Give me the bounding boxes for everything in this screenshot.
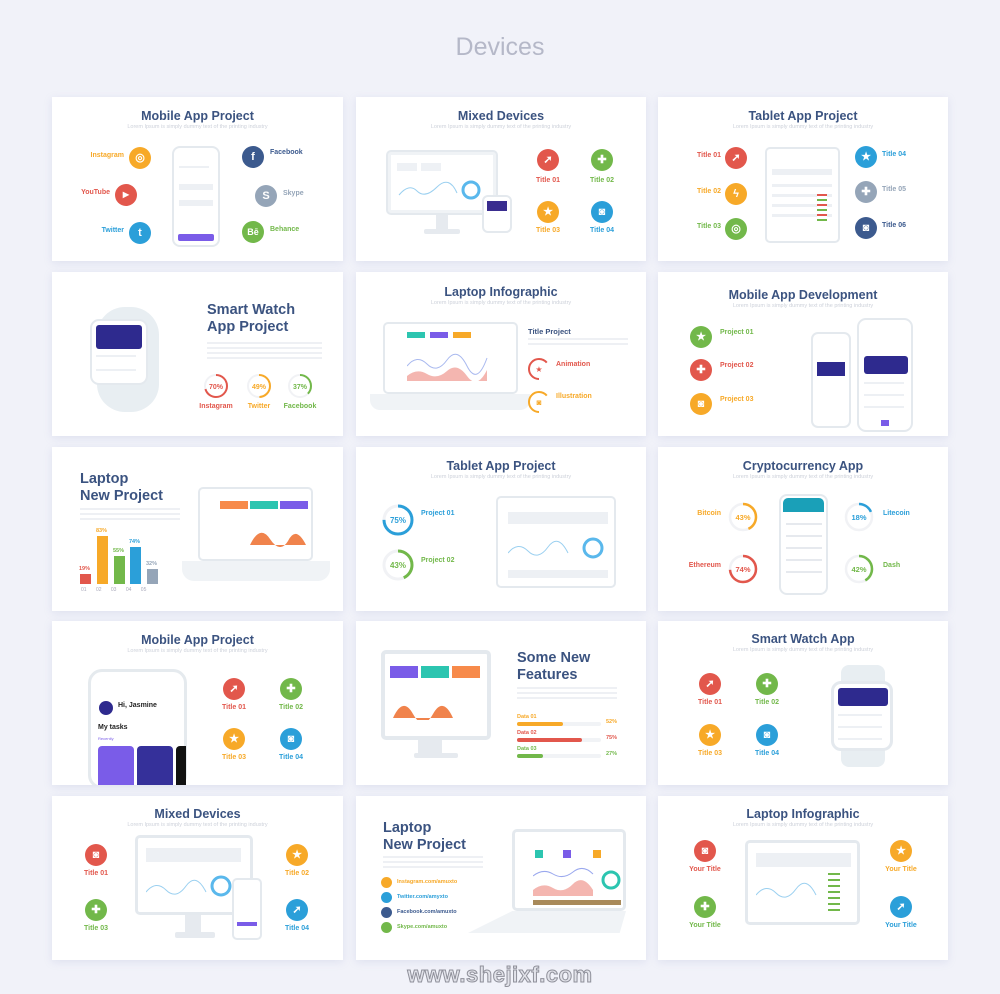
- heading: Cryptocurrency App: [743, 459, 863, 473]
- heading: Smart Watch: [207, 302, 295, 318]
- icon: twitter: t: [138, 227, 142, 239]
- panel: some new features: [356, 621, 646, 785]
- bar chart: 01 02 03 04 05: [81, 587, 146, 593]
- progress: data 02: Data 02: [517, 730, 537, 736]
- icon: your title 1: ◙: [702, 845, 708, 857]
- label your title 2: Your Title: [689, 922, 721, 929]
- label title 02: Title 02: [279, 704, 303, 711]
- panel: cryptocurrency app: [658, 447, 948, 611]
- ring: project 02 43%: [382, 550, 414, 580]
- phone: [88, 669, 187, 789]
- ring: twitter 49%: 49%: [252, 384, 267, 391]
- icon: your title 3: [890, 840, 912, 862]
- laptop: [745, 840, 860, 925]
- icon: facebook: [242, 146, 264, 168]
- heading: Laptop: [80, 471, 128, 487]
- subtitle: Lorem Ipsum is simply dummy text of the printing industry: [127, 648, 268, 654]
- heading: Tablet App Project: [748, 109, 858, 123]
- icon: skype: [255, 185, 277, 207]
- monitor and phone: [135, 835, 262, 940]
- subtitle: Lorem Ipsum is simply dummy text of the printing industry: [127, 124, 268, 130]
- icon: title 04: ◙: [599, 206, 605, 218]
- label title 01: Title 01: [698, 699, 722, 706]
- description: [207, 342, 322, 362]
- social list: Facebook.com/amuxto: [397, 909, 457, 915]
- label title 04: Title 04: [279, 754, 303, 761]
- ring: project 01 75%: [382, 504, 414, 536]
- smart watch: [831, 665, 893, 767]
- icon: title 01: [699, 673, 721, 695]
- icon: title 01: [223, 678, 245, 700]
- icon: your title 4: [890, 896, 912, 918]
- label title 02: Title 02: [697, 188, 721, 195]
- label title 05: Title 05: [882, 186, 906, 193]
- heading: [80, 471, 163, 504]
- label title 03: Title 03: [84, 925, 108, 932]
- icon: instagram: [129, 147, 151, 169]
- ring: bitcoin 43%: 43%: [735, 513, 751, 522]
- laptop: [370, 322, 530, 410]
- ring: instagram 70%: [204, 374, 228, 398]
- label title 04: Title 04: [285, 925, 309, 932]
- heading: Some New: [517, 650, 590, 666]
- icon: title 03: [699, 724, 721, 746]
- title: Devices: [456, 33, 544, 61]
- heading: Mixed Devices: [154, 807, 241, 821]
- icon: instagram: ◎: [135, 152, 145, 164]
- ring: ethereum 74%: 74%: [735, 565, 751, 574]
- icon: title 03: ★: [705, 729, 715, 741]
- ring: dash 42%: [845, 554, 874, 583]
- ring icon: animation: ★: [535, 365, 543, 374]
- ring: instagram 70%: 70%: [209, 384, 224, 391]
- social list: [381, 877, 457, 933]
- label title 04: Title 04: [590, 227, 614, 234]
- icon: project 01: ★: [696, 331, 706, 343]
- icon: your title 2: [694, 896, 716, 918]
- ring: facebook 37%: 37%: [293, 384, 308, 391]
- heading: New Project: [80, 488, 163, 504]
- icon: project 03: [690, 393, 712, 415]
- icon: title 02: ϟ: [733, 188, 739, 200]
- progress: data 03: Data 03: [517, 746, 537, 752]
- heading: Laptop Infographic: [746, 807, 860, 821]
- progress: data 03: 27%: [606, 751, 617, 757]
- icon: behance: [242, 221, 264, 243]
- label ethereum: Ethereum: [689, 562, 721, 569]
- panel: laptop new project with bars: 83%: [96, 528, 107, 534]
- panel: smart watch app: [658, 621, 948, 785]
- icon: project 02: ✚: [696, 364, 706, 376]
- laptop: [182, 487, 330, 581]
- icon: title 04: [756, 724, 778, 746]
- heading: Mobile App Project: [141, 633, 254, 647]
- subtitle: Lorem Ipsum is simply dummy text of the printing industry: [733, 822, 873, 828]
- icon: title 02: ✚: [286, 683, 296, 695]
- label title 02: Title 02: [285, 870, 309, 877]
- icon: title 02: [591, 149, 613, 171]
- icon: skype: S: [262, 190, 270, 202]
- heading: Mixed Devices: [458, 109, 544, 123]
- icon: title 01: ➚: [229, 683, 239, 695]
- icon: youtube: [115, 184, 137, 206]
- description: [517, 687, 617, 699]
- ring: facebook 37%: [288, 374, 312, 398]
- subtitle: Lorem Ipsum is simply dummy text of the printing industry: [733, 124, 873, 130]
- icon: title 03: ◎: [731, 223, 741, 235]
- icon: title 03: ★: [229, 733, 239, 745]
- icon: title 03: ✚: [91, 904, 101, 916]
- monitor: [381, 650, 491, 758]
- progress: data 01: 52%: [606, 719, 617, 725]
- progress: data 01: [517, 714, 617, 726]
- icon: title 06: ◙: [863, 222, 869, 234]
- bar chart: [79, 528, 158, 593]
- ring: project 02 43%: 43%: [390, 561, 406, 570]
- description: [80, 508, 180, 520]
- label title 03: Title 03: [222, 754, 246, 761]
- panel: tablet app project 2: [356, 447, 646, 611]
- panel: laptop infographic 2: [658, 796, 948, 960]
- label project 01: Project 01: [720, 329, 753, 336]
- label litecoin: Litecoin: [883, 510, 910, 517]
- ring icon: animation: [528, 358, 548, 380]
- heading: App Project: [207, 319, 288, 335]
- icon: title 01: [537, 149, 559, 171]
- label youtube: YouTube: [81, 189, 110, 196]
- icon: title 05: ✚: [861, 186, 871, 198]
- ring icon: illustration: [528, 391, 548, 413]
- heading: New Project: [383, 837, 466, 853]
- icon: title 01: ➚: [705, 678, 715, 690]
- heading: Smart Watch App: [751, 632, 855, 646]
- heading: Laptop Infographic: [444, 285, 558, 299]
- social list: Twitter.com/amyxto: [397, 894, 448, 900]
- icon: title 02: [756, 673, 778, 695]
- icon: title 03: [537, 201, 559, 223]
- heading: Laptop: [383, 820, 431, 836]
- label facebook: Facebook: [284, 403, 316, 410]
- icon: your title 4: ➚: [896, 901, 906, 913]
- heading: Mobile App Project: [141, 109, 254, 123]
- label title 02: Title 02: [755, 699, 779, 706]
- label instagram: Instagram: [199, 403, 233, 410]
- ring: dash 42%: 42%: [851, 565, 867, 574]
- label twitter: Twitter: [102, 227, 124, 234]
- label title 01: Title 01: [84, 870, 108, 877]
- ring: litecoin 18%: 18%: [851, 513, 867, 522]
- bar chart: 74%: [129, 539, 140, 545]
- heading: Tablet App Project: [446, 459, 556, 473]
- icon: title 02: [280, 678, 302, 700]
- label title 01: Title 01: [222, 704, 246, 711]
- icon: title 05: [855, 181, 877, 203]
- ring: project 01 75%: 75%: [390, 516, 406, 525]
- icon: behance: Bē: [247, 227, 259, 237]
- label twitter: Twitter: [248, 403, 270, 410]
- panel: mixed devices 2: [52, 796, 343, 960]
- panel: laptop new project with bars: [52, 447, 343, 611]
- subtitle: Lorem Ipsum is simply dummy text of the printing industry: [431, 300, 571, 306]
- label behance: Behance: [270, 226, 299, 233]
- subtitle: Lorem Ipsum is simply dummy text of the printing industry: [733, 303, 873, 309]
- panel: tablet app project 1: [658, 97, 948, 261]
- icon: project 03: ◙: [698, 398, 704, 410]
- panel: smart watch app project: [52, 272, 343, 436]
- icon: your title 2: ✚: [700, 901, 710, 913]
- label dash: Dash: [883, 562, 900, 569]
- icon: title 01: ◙: [93, 849, 99, 861]
- ring: litecoin 18%: [845, 502, 873, 531]
- icon: title 03: ★: [543, 206, 553, 218]
- icon: title 04: [591, 201, 613, 223]
- heading: [207, 302, 295, 335]
- panel: laptop infographic 1: [356, 272, 646, 436]
- bar chart: 55%: [113, 548, 124, 554]
- icon: twitter: [129, 222, 151, 244]
- icon: title 04: ◙: [288, 733, 294, 745]
- subtitle: Lorem Ipsum is simply dummy text of the printing industry: [431, 474, 571, 480]
- phones: [811, 318, 913, 432]
- label title 01: Title 01: [536, 177, 560, 184]
- icon: title 01: [725, 147, 747, 169]
- icon: title 03: [725, 218, 747, 240]
- ring: twitter 49%: [247, 374, 271, 398]
- social list: Instagram.com/amuxto: [397, 879, 457, 885]
- icon: title 02: ✚: [762, 678, 772, 690]
- label title 02: Title 02: [590, 177, 614, 184]
- watermark: www.shejixf.com: [407, 962, 593, 987]
- monitor: [386, 150, 498, 234]
- label title 03: Title 03: [536, 227, 560, 234]
- icon: title 04: [286, 899, 308, 921]
- tablet: [496, 496, 616, 588]
- smart watch: [90, 307, 159, 412]
- panel: mobile app project 2: [52, 621, 343, 785]
- icon: project 01: [690, 326, 712, 348]
- heading: [383, 820, 466, 853]
- label facebook: Facebook: [270, 149, 303, 156]
- panel: laptop new project social: [356, 796, 646, 960]
- phone: Hi, Jasmine: [118, 702, 157, 709]
- icon: title 01: ➚: [731, 152, 741, 164]
- label your title 3: Your Title: [885, 866, 917, 873]
- icon: title 03: [85, 899, 107, 921]
- label project 02: Project 02: [720, 362, 753, 369]
- ring icon: illustration: ◙: [537, 398, 542, 407]
- phone mockup: [172, 146, 220, 247]
- heading: Mobile App Development: [729, 288, 877, 302]
- icon: title 02: [286, 844, 308, 866]
- heading: Features: [517, 667, 577, 683]
- icon: your title 1: [694, 840, 716, 862]
- heading: [517, 650, 590, 683]
- icon: youtube: ▶: [123, 190, 129, 199]
- bar chart: 19%: [79, 566, 90, 572]
- icon: title 02: ★: [292, 849, 302, 861]
- icon: title 01: [85, 844, 107, 866]
- icon: title 04: [855, 146, 877, 168]
- icon: title 06: [855, 217, 877, 239]
- label animation: Animation: [556, 361, 590, 368]
- phone: My tasks: [98, 724, 128, 731]
- subtitle: Lorem Ipsum is simply dummy text of the printing industry: [431, 124, 571, 130]
- subtitle: Lorem Ipsum is simply dummy text of the printing industry: [733, 647, 873, 653]
- panel: mixed devices 1: [356, 97, 646, 261]
- icon: title 04: ◙: [764, 729, 770, 741]
- smart watch: [482, 195, 512, 233]
- label project 02: Project 02: [421, 557, 454, 564]
- panel: mobile app development: [658, 272, 948, 436]
- icon: title 04: ➚: [292, 904, 302, 916]
- progress: data 02: [517, 730, 617, 742]
- label title 04: Title 04: [755, 750, 779, 757]
- panel: mobile app project 1: [52, 97, 343, 261]
- icon: title 04: [280, 728, 302, 750]
- progress: data 01: Data 01: [517, 714, 537, 720]
- ring: bitcoin 43%: [729, 502, 758, 531]
- icon: title 01: ➚: [543, 154, 553, 166]
- phone: Recently: [98, 736, 114, 741]
- subtitle: Lorem Ipsum is simply dummy text of the printing industry: [733, 474, 873, 480]
- label instagram: Instagram: [91, 152, 124, 159]
- label skype: Skype: [283, 190, 304, 197]
- label your title 1: Your Title: [689, 866, 721, 873]
- label title 01: Title 01: [697, 152, 721, 159]
- subtitle: Lorem Ipsum is simply dummy text of the printing industry: [127, 822, 268, 828]
- label project 03: Project 03: [720, 396, 753, 403]
- label title 03: Title 03: [698, 750, 722, 757]
- icon: title 03: [223, 728, 245, 750]
- label title 04: Title 04: [882, 151, 906, 158]
- icon: your title 3: ★: [896, 845, 906, 857]
- description: [383, 856, 483, 868]
- label your title 4: Your Title: [885, 922, 917, 929]
- laptop: [468, 829, 626, 933]
- tablet: [765, 147, 840, 243]
- icon: title 04: ★: [861, 151, 871, 163]
- phone: [779, 494, 828, 595]
- progress: data 03: [517, 746, 617, 758]
- ring: ethereum 74%: [728, 554, 758, 584]
- label bitcoin: Bitcoin: [697, 510, 721, 517]
- progress: data 02: 75%: [606, 735, 617, 741]
- social list: Skype.com/amuxto: [397, 924, 447, 930]
- label illustration: Illustration: [556, 393, 592, 400]
- icon: project 02: [690, 359, 712, 381]
- bar chart: 32%: [146, 561, 157, 567]
- icon: facebook: f: [251, 151, 255, 163]
- text block: title project: Title Project: [528, 327, 571, 336]
- label title 03: Title 03: [697, 223, 721, 230]
- icon: title 02: ✚: [597, 154, 607, 166]
- label project 01: Project 01: [421, 510, 454, 517]
- label title 06: Title 06: [882, 222, 906, 229]
- icon: title 02: [725, 183, 747, 205]
